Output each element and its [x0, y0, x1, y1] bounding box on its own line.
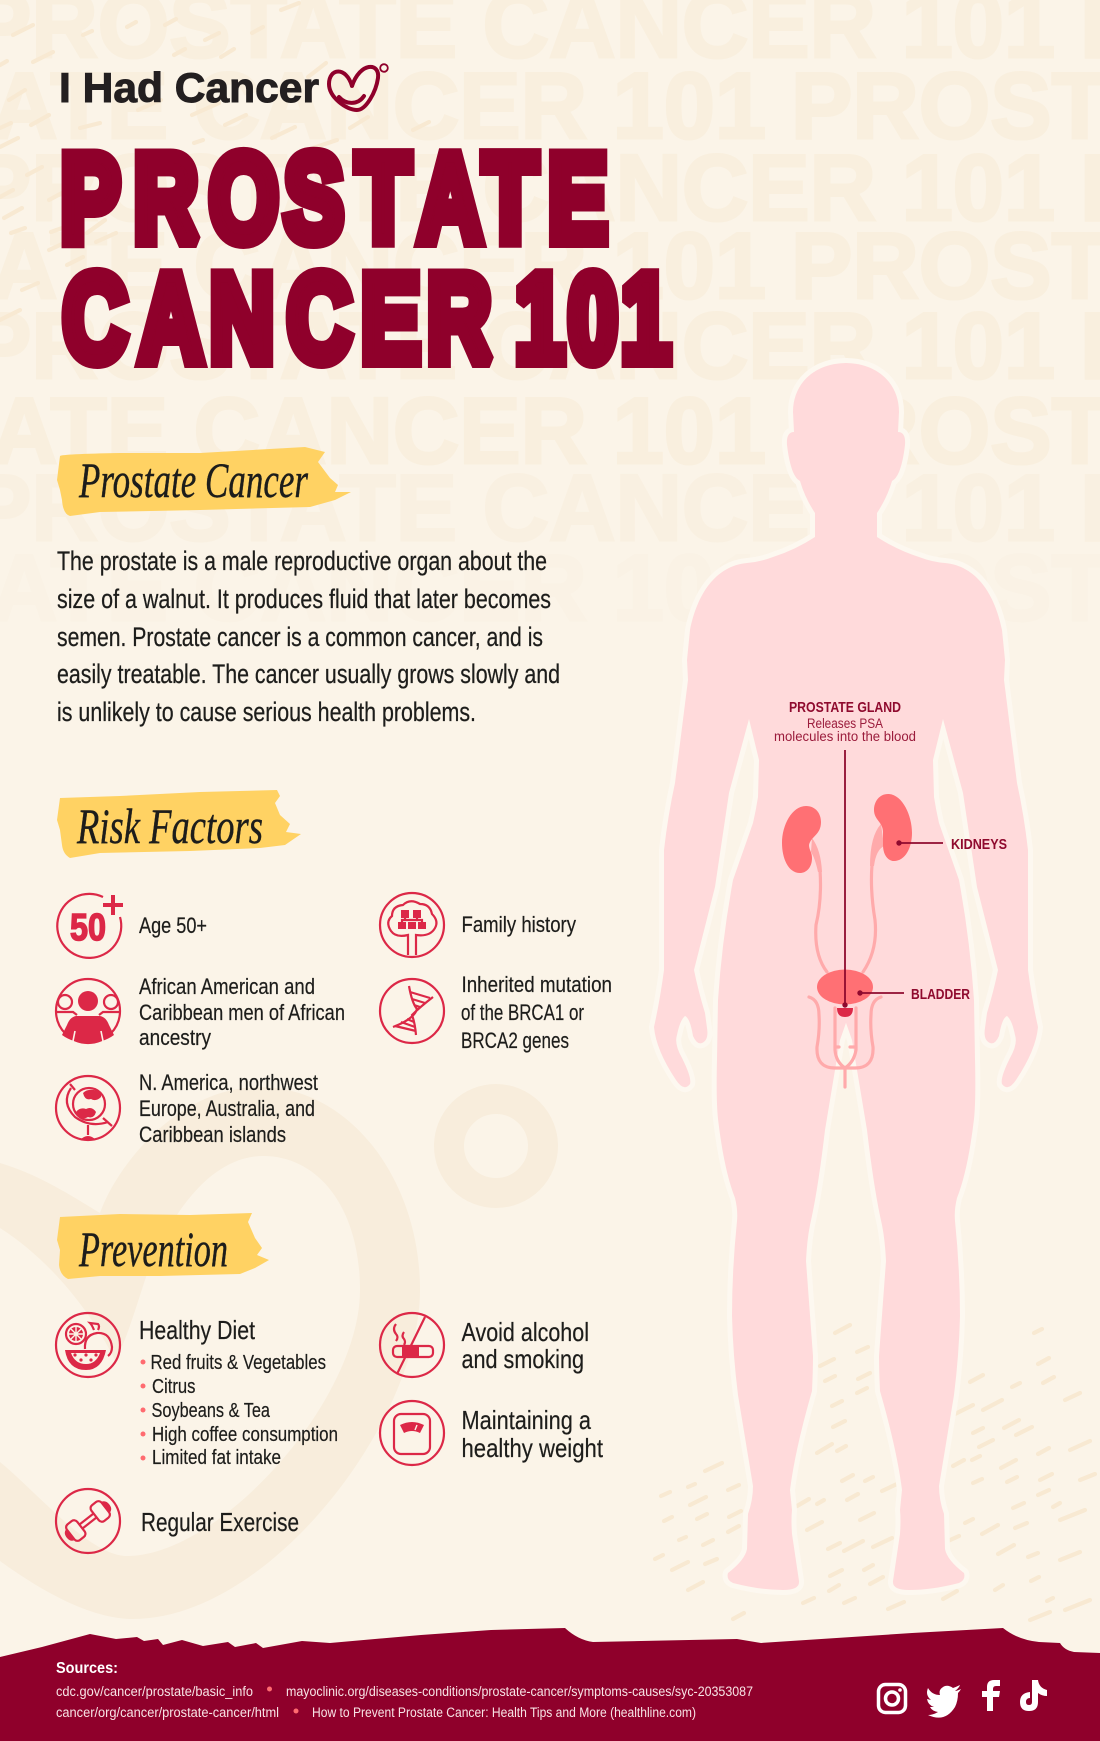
prevention: healthy diet: Red fruits & Vegetables: [150, 1351, 326, 1374]
callout: prostate gland: [774, 699, 916, 1008]
title: CANCER 101: [63, 249, 671, 387]
sources: mayoclinic.org/diseases-conditions/prostate-cancer/symptoms-causes/syc-20353087: [286, 1684, 753, 1699]
footer band: [0, 1628, 1100, 1741]
section: risk factors: [56, 790, 612, 1147]
risk: family history: Family history: [462, 912, 576, 937]
risk: ancestry: [56, 974, 345, 1050]
body silhouette: [654, 363, 1038, 1590]
sources: Sources:: [56, 1660, 118, 1677]
title: PROSTATE: [61, 129, 608, 267]
prevention: healthy diet: Citrus: [152, 1375, 196, 1398]
risk: geography: N. America, northwest: [139, 1070, 318, 1095]
callout: prostate gland: molecules into the blood: [774, 729, 916, 744]
intro paragraph: [57, 546, 560, 727]
section: prostate cancer intro: [57, 447, 560, 727]
callout: kidneys: [896, 836, 1007, 853]
heading: Prostate Cancer: Prostate Cancer: [78, 452, 308, 508]
prostate gland: [837, 1008, 853, 1017]
urinary tract lines: [809, 824, 884, 1087]
background watermark text: PROSTATE CANCER 101: [0, 293, 1055, 398]
risk: age 50+: [57, 894, 207, 958]
icon: tiktok: [1020, 1680, 1047, 1711]
prevention: healthy weight: healthy weight: [462, 1433, 604, 1463]
background heart watermark: [0, 1087, 420, 1619]
intro paragraph: The prostate is a male reproductive organ about the: [57, 546, 547, 576]
sources: How to Prevent Prostate Cancer: Health Tips and More (healthline.com): [312, 1705, 696, 1720]
heading: Prostate Cancer: [57, 447, 351, 516]
callout: bladder: [857, 986, 970, 1003]
prevention: avoid alcohol and smoking: and smoking: [462, 1344, 584, 1374]
risk: ancestry: ancestry: [139, 1025, 211, 1050]
risk: geography: Caribbean islands: [139, 1122, 286, 1147]
icon: twitter: [927, 1685, 961, 1718]
body figure: [654, 363, 1038, 1590]
prevention: healthy diet: Healthy Diet: [139, 1315, 256, 1345]
intro paragraph: easily treatable. The cancer usually grows slowly and: [57, 659, 560, 689]
background watermark text: [0, 0, 1100, 640]
risk: ancestry: African American and: [139, 974, 315, 999]
callout: prostate gland: PROSTATE GLAND: [789, 699, 901, 716]
background watermark text: PROSTATE CANCER 101: [0, 135, 1055, 240]
prevention: regular exercise: [56, 1489, 299, 1553]
icon: instagram: [878, 1684, 906, 1712]
sources: [56, 1660, 753, 1720]
risk: family history: [380, 893, 576, 957]
risk: BRCA genes: of the BRCA1 or: [461, 1000, 584, 1025]
prevention: healthy diet: Limited fat intake: [152, 1446, 281, 1469]
prevention: avoid alcohol and smoking: Avoid alcohol: [462, 1317, 589, 1347]
sources: cancer/org/cancer/prostate-cancer/html: [56, 1705, 279, 1720]
logo: I Had Cancer: [59, 64, 319, 111]
intro paragraph: is unlikely to cause serious health problems.: [57, 697, 476, 727]
risk: BRCA genes: Inherited mutation: [462, 972, 612, 997]
background ring watermark: [449, 1099, 543, 1193]
callout: prostate gland: Releases PSA: [807, 716, 883, 731]
prevention: healthy diet: Soybeans & Tea: [152, 1399, 270, 1422]
background watermark text: PROSTATE CANCER 101: [0, 455, 1055, 560]
prevention: avoid alcohol and smoking: [380, 1313, 589, 1377]
heading: Prevention: Prevention: [78, 1221, 228, 1277]
kidneys: [782, 794, 912, 873]
risk: geography: Europe, Australia, and: [139, 1096, 315, 1121]
prevention: healthy diet: High coffee consumption: [152, 1423, 338, 1446]
prevention: healthy weight: Maintaining a: [462, 1405, 591, 1435]
risk: geography: [56, 1070, 318, 1147]
risk: BRCA genes: BRCA2 genes: [461, 1028, 569, 1053]
risk: ancestry: Caribbean men of African: [139, 1000, 345, 1025]
risk: age 50+: 50: [70, 907, 106, 949]
bladder: [817, 970, 873, 1004]
heading: Prevention: [57, 1213, 269, 1279]
section: prevention: [56, 1213, 604, 1553]
intro paragraph: size of a walnut. It produces fluid that later becomes: [57, 584, 551, 614]
prevention: regular exercise: Regular Exercise: [141, 1507, 299, 1537]
heading: Risk Factors: Risk Factors: [76, 798, 263, 854]
prevention: healthy diet: [56, 1313, 338, 1469]
risk: BRCA genes: [380, 972, 612, 1053]
title: [61, 129, 671, 387]
callout: bladder: BLADDER: [911, 986, 970, 1003]
sources: cdc.gov/cancer/prostate/basic_info: [56, 1684, 253, 1699]
intro paragraph: semen. Prostate cancer is a common cancer, and is: [57, 622, 543, 652]
icon: facebook: [982, 1680, 1000, 1711]
callout: kidneys: KIDNEYS: [951, 836, 1007, 853]
heading: Risk Factors: [57, 790, 301, 858]
prevention: healthy weight: [380, 1401, 604, 1465]
risk: age 50+: Age 50+: [139, 913, 207, 938]
